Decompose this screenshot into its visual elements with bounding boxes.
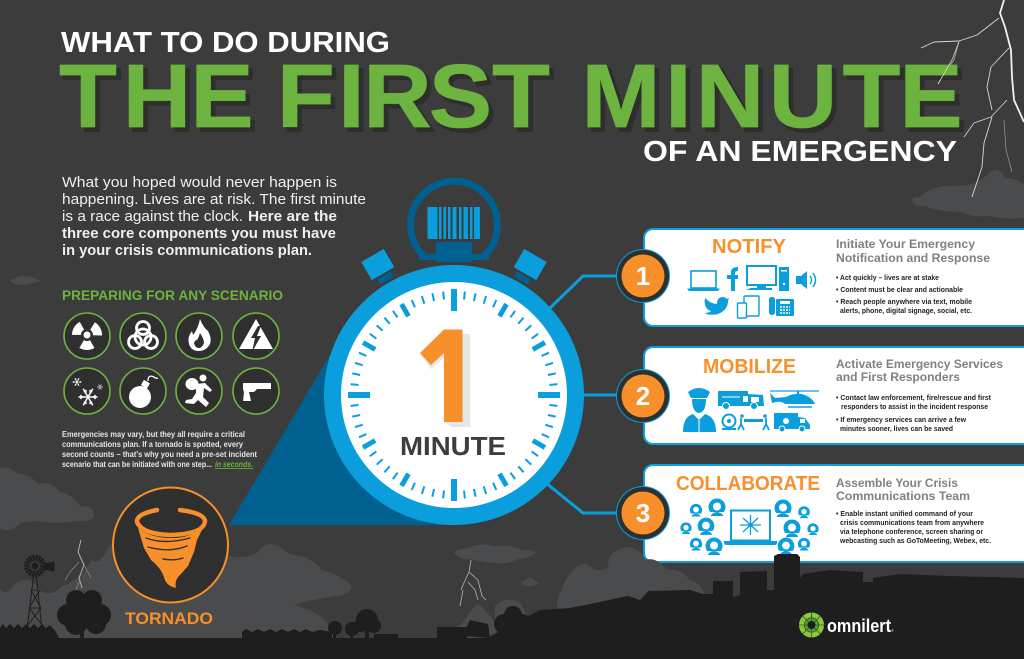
bullet list xyxy=(836,273,972,315)
ground and skyline silhouette xyxy=(0,554,1024,659)
omnilert logo xyxy=(799,612,894,638)
icon: biohazard xyxy=(120,313,166,359)
title: WHAT TO DO DURING xyxy=(61,27,390,59)
heading: preparing for any scenario: PREPARING FOR ANY SCENARIO xyxy=(62,288,283,303)
panel: mobilize xyxy=(616,347,1024,444)
right button xyxy=(510,249,547,287)
icon: robber xyxy=(176,368,222,414)
bullet list: • Act quickly – lives are at stake xyxy=(836,273,939,282)
intro text: three core components you must have xyxy=(62,225,336,242)
number badge 1 xyxy=(616,249,670,303)
lightning over title xyxy=(938,42,959,84)
subheading: and First Responders xyxy=(836,370,960,384)
bullet list: alerts, phone, digital signage, social, etc. xyxy=(840,306,972,315)
bullet list: • Contact law enforcement, fire/rescue and first xyxy=(836,393,992,402)
heading: COLLABORATE xyxy=(676,473,820,495)
crown ring xyxy=(410,181,497,262)
team icons xyxy=(680,498,819,556)
bullet list: responders to assist in the incident response xyxy=(841,402,988,411)
tornado label: TORNADO xyxy=(125,609,213,628)
icon: fire xyxy=(176,313,222,359)
trees and fields xyxy=(0,590,532,640)
subheading xyxy=(836,237,990,265)
bullet list: webcasting such as GoToMeeting, Webex, etc. xyxy=(839,536,991,545)
panel: collaborate xyxy=(616,465,1024,562)
body text: emergencies: in seconds. xyxy=(215,460,253,469)
heading: MOBILIZE xyxy=(703,356,796,378)
icon: snowflakes xyxy=(64,368,110,414)
bullet list: • If emergency services can arrive a few xyxy=(836,415,966,424)
subheading: Communications Team xyxy=(836,489,970,503)
bullet list: crisis communications team from anywhere xyxy=(840,518,984,527)
responder icons xyxy=(683,388,819,432)
stopwatch xyxy=(229,181,584,525)
body text: emergencies: communications plan. If a tornado is spotted, every xyxy=(62,440,243,449)
subheading: Initiate Your Emergency xyxy=(836,237,975,251)
bullet list: minutes sooner, lives can be saved xyxy=(840,424,953,433)
clock shadow wedge xyxy=(229,348,454,525)
intro text: What you hoped would never happen is xyxy=(62,174,337,191)
icon: electrical hazard xyxy=(233,313,279,359)
intro text: is a race against the clock. xyxy=(62,208,243,225)
body text: emergencies xyxy=(62,430,257,469)
bullet list: • Content must be clear and actionable xyxy=(836,285,963,294)
left button xyxy=(361,249,398,287)
title: THE FIRST MINUTE xyxy=(59,45,963,147)
panel: notify xyxy=(616,229,1024,326)
subheading xyxy=(836,357,1003,384)
title: OF AN EMERGENCY xyxy=(643,136,957,168)
bullet list: via telephone conference, screen sharing or xyxy=(840,527,983,536)
windmill xyxy=(27,558,54,630)
foreground cloud and building over panel 3 xyxy=(608,547,800,600)
minute label: MINUTE xyxy=(400,431,506,461)
intro text xyxy=(62,174,366,259)
wind swirl xyxy=(218,593,280,620)
subheading: Activate Emergency Services xyxy=(836,357,1003,371)
number badge 2: 2 xyxy=(636,381,650,411)
subheading xyxy=(836,476,970,503)
intro text: Here are the xyxy=(248,208,337,225)
icon: bomb xyxy=(120,368,166,414)
subheading: Assemble Your Crisis xyxy=(836,476,958,490)
number badge 3: 3 xyxy=(636,498,650,528)
bullet list xyxy=(836,393,992,433)
subheading: Notification and Response xyxy=(836,251,990,265)
connector lines xyxy=(546,276,625,513)
heading: NOTIFY xyxy=(712,236,787,258)
clock face xyxy=(324,265,584,525)
icon: tornado xyxy=(137,510,205,588)
number badge 1: 1 xyxy=(636,261,650,291)
scenario icons xyxy=(64,313,279,414)
icon: radiation xyxy=(64,313,110,359)
icon: handgun xyxy=(233,368,279,414)
number badge 2 xyxy=(616,369,670,423)
title: THE FIRST MINUTE xyxy=(63,49,967,151)
intro text: in your crisis communications plan. xyxy=(62,242,312,259)
bullet list: • Reach people anywhere via text, mobile xyxy=(836,297,972,306)
tornado badge xyxy=(113,488,228,602)
storm clouds xyxy=(0,170,1024,640)
number badge 3 xyxy=(616,486,670,540)
numeral 1 xyxy=(420,330,470,427)
body text: emergencies: scenario that can be initiated with one step... xyxy=(62,460,212,469)
bullet list xyxy=(836,509,991,545)
omnilert logo: ® xyxy=(891,628,894,633)
intro text: happening. Lives are at risk. The first minute xyxy=(62,191,366,208)
body text: emergencies: second counts – that’s why you need a pre-set incident xyxy=(62,450,257,459)
omnilert logo: omnilert xyxy=(827,615,891,636)
device icons xyxy=(687,266,816,318)
minute ticks xyxy=(338,279,570,511)
body text: emergencies: Emergencies may vary, but they all require a critical xyxy=(62,430,245,439)
bullet list: • Enable instant unified command of your xyxy=(836,509,973,518)
